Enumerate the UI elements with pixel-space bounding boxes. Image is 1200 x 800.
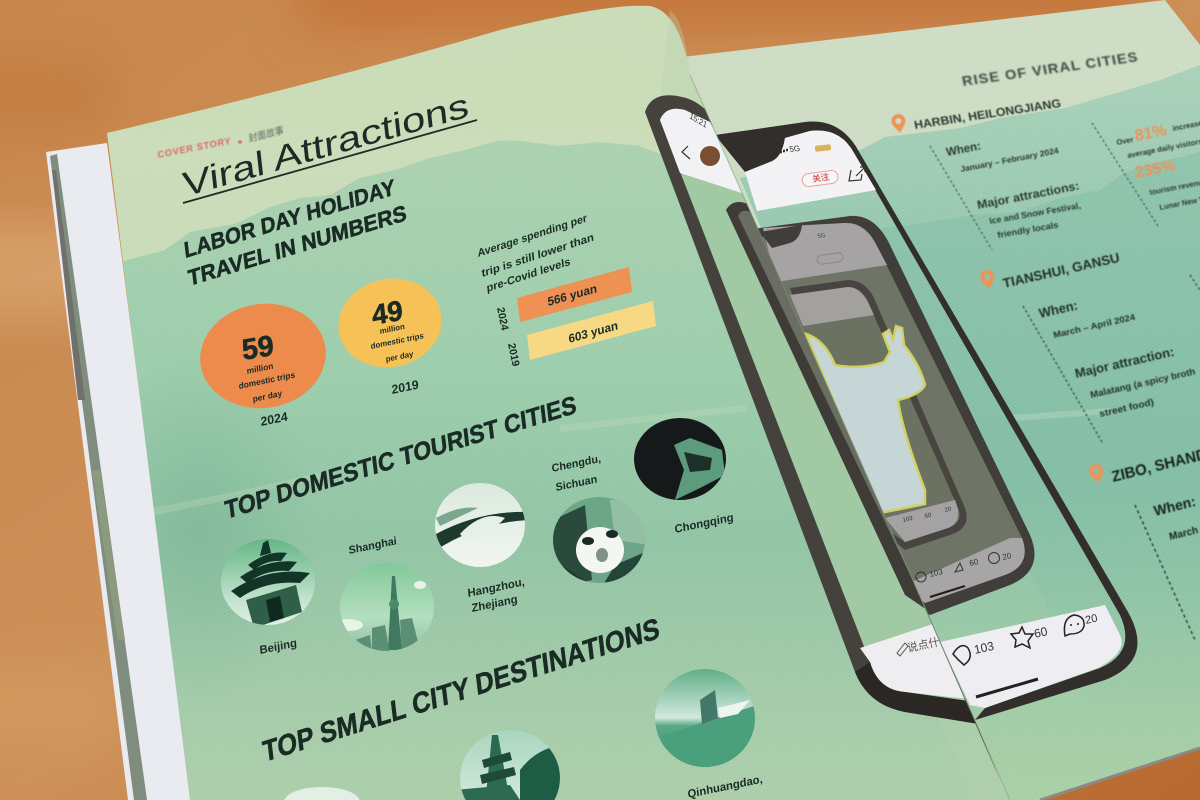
section header: cover story <box>157 123 284 161</box>
stat bubble: 59 million 2024 <box>193 296 333 429</box>
ink wash: left page <box>80 130 1020 800</box>
icon: pin <box>891 113 907 134</box>
bar 2019 <box>505 301 656 368</box>
heading: Labor Day holiday travel in numbers: TRAVEL IN NUMBERS <box>187 200 408 291</box>
stat bubble: 59 million 2024: 59 <box>240 330 275 367</box>
block: Tianshui <box>979 250 1200 442</box>
phone level 1: folded left page <box>645 95 1000 780</box>
phone level 1: action icons and counts: 103 <box>973 639 995 657</box>
city: Qinhuangdao <box>655 669 755 767</box>
stat bubble: 49 million 2019: 2019 <box>391 377 419 397</box>
block: Harbin: When: <box>945 139 982 159</box>
phone illustration across the spine <box>645 95 1137 780</box>
stat bubble: 49 million 2019: 49 <box>371 294 404 331</box>
section header: cover story: COVER STORY <box>157 136 232 161</box>
icon: pin <box>1088 463 1106 484</box>
phone level 1: status text and buttons <box>780 144 865 187</box>
page curl shading <box>660 10 1010 800</box>
city: Chongqing <box>634 418 726 500</box>
ink wash: right page <box>740 65 1200 800</box>
block: Harbin: Over <box>1116 135 1134 147</box>
phone level 1: action icons and counts: 60 <box>1033 624 1049 641</box>
stat bubble: 59 million 2024: million <box>246 361 274 376</box>
caption: Average spending per <box>477 212 588 260</box>
block: Harbin: 81% <box>1133 121 1168 145</box>
label: Hangzhou: Hangzhou, <box>467 576 525 600</box>
caption <box>477 212 595 295</box>
title: Viral Attractions <box>181 86 477 205</box>
white page block edge <box>46 143 192 800</box>
bottom white bar <box>860 624 965 698</box>
stat bubble: 49 million 2019: domestic trips <box>370 331 425 351</box>
label: Beijing: Beijing <box>259 637 297 657</box>
bar 2024 <box>494 267 632 332</box>
phone level 2: right page <box>745 216 1034 615</box>
label: Chengdu: Chengdu, <box>551 453 601 475</box>
icon: pin <box>979 269 997 290</box>
phone level 3: right page <box>790 280 967 550</box>
block: Tianshui: March – April 2024 <box>1052 312 1136 340</box>
block: Harbin: HARBIN, HEILONGJIANG <box>913 97 1062 132</box>
phone level 2: right page: 103 <box>929 567 944 579</box>
bar 2019: 2019 <box>505 342 522 368</box>
label: Chongqing: Chongqing <box>674 512 734 536</box>
block: Harbin <box>891 97 1200 250</box>
section header: cover story: 封面故事 <box>248 123 284 145</box>
label: Shanghai: Shanghai <box>348 535 397 557</box>
caption: trip is still lower than <box>481 231 595 280</box>
phone level 3: right page: 20 <box>944 506 953 514</box>
top white bar <box>660 109 748 195</box>
label: Hangzhou <box>467 576 525 615</box>
bar 2024: 566 yuan <box>547 281 598 309</box>
phone level 2: right page: 60 <box>969 557 980 568</box>
block: Tianshui: Malatang (a spicy broth <box>1089 366 1196 400</box>
phone level 2: right page: 20 <box>1002 551 1013 562</box>
phone level 3: right page: 103 <box>902 516 914 524</box>
figure silhouette <box>806 326 925 513</box>
phone level 1: status text and buttons: 5G <box>789 144 801 154</box>
city: Beijing <box>221 539 315 625</box>
city: small pagoda <box>460 730 560 800</box>
spine fold shadow <box>690 75 1010 800</box>
city: partly visible white circle <box>284 787 360 800</box>
bar 2024: 2024 <box>494 306 511 332</box>
top status bar <box>745 130 876 211</box>
stat bubble: 59 million 2024: per day <box>252 388 283 404</box>
phone level 1: action icons and counts: 20 <box>1084 612 1099 627</box>
label: Chengdu <box>551 453 601 494</box>
heading: rise of viral cities: RISE OF VIRAL CITIES <box>960 48 1140 89</box>
stat bubble: 49 million 2019 <box>330 269 450 397</box>
bottom action bar <box>940 605 1122 708</box>
bottom page edge <box>1040 748 1200 800</box>
phone level 1: folded left page: 15:21 <box>688 111 708 130</box>
phone level 1: right page frame <box>715 122 1137 720</box>
panel: left page <box>80 6 1020 800</box>
phone level 3: right page: 60 <box>924 512 933 520</box>
heading: top domestic tourist cities: TOP DOMESTIC TOURIST CITIES <box>223 391 578 525</box>
bottom frame shadow <box>855 662 985 725</box>
block: Harbin: Ice and Snow Festival, <box>988 200 1082 226</box>
block: Tianshui: street food) <box>1098 397 1155 419</box>
city: Chengdu <box>553 497 645 583</box>
block: Harbin: 235% <box>1133 156 1177 182</box>
chart: average spending bars <box>477 212 656 368</box>
heading: top small city destinations: TOP SMALL CITY DESTINATIONS <box>261 613 661 769</box>
block: Zibo <box>1088 438 1200 640</box>
block: Harbin: friendly locals <box>996 219 1059 240</box>
block: Tianshui: TIANSHUI, GANSU <box>1001 250 1121 291</box>
block: Harbin: January – February 2024 <box>960 146 1060 174</box>
phone level 1: folded left page: 说点什么 <box>906 632 951 655</box>
caption: pre-Covid levels <box>486 256 571 295</box>
block: Zibo: When: <box>1152 494 1197 520</box>
stat bubble: 59 million 2024: domestic trips <box>238 369 296 391</box>
phone level 2: right page: 5G <box>817 233 827 240</box>
panel: right page <box>640 0 1200 800</box>
city: Hangzhou <box>435 483 525 567</box>
heading: Labor Day holiday travel in numbers: LABOR DAY HOLIDAY <box>183 174 396 263</box>
label: Chengdu: Sichuan <box>555 473 598 494</box>
label: Hangzhou: Zhejiang <box>471 594 518 615</box>
phone level 1: status text and buttons: 关注 <box>811 171 830 184</box>
title: Viral Attractions: Viral Attractions <box>181 86 471 205</box>
phone level 1: action icons and counts <box>953 612 1099 665</box>
stat bubble: 49 million 2019: million <box>379 322 405 336</box>
block: Harbin: Major attractions: <box>976 179 1081 212</box>
stat bubble: 49 million 2019: per day <box>385 349 414 364</box>
bar 2019: 603 yuan <box>568 318 619 346</box>
phone level 2: folded <box>726 202 1000 780</box>
block: Tianshui: When: <box>1037 297 1079 321</box>
block: Tianshui: Major attraction: <box>1074 345 1176 381</box>
home indicator <box>976 679 1038 697</box>
city: Shanghai <box>340 563 434 651</box>
stat bubble: 59 million 2024: 2024 <box>260 409 288 429</box>
